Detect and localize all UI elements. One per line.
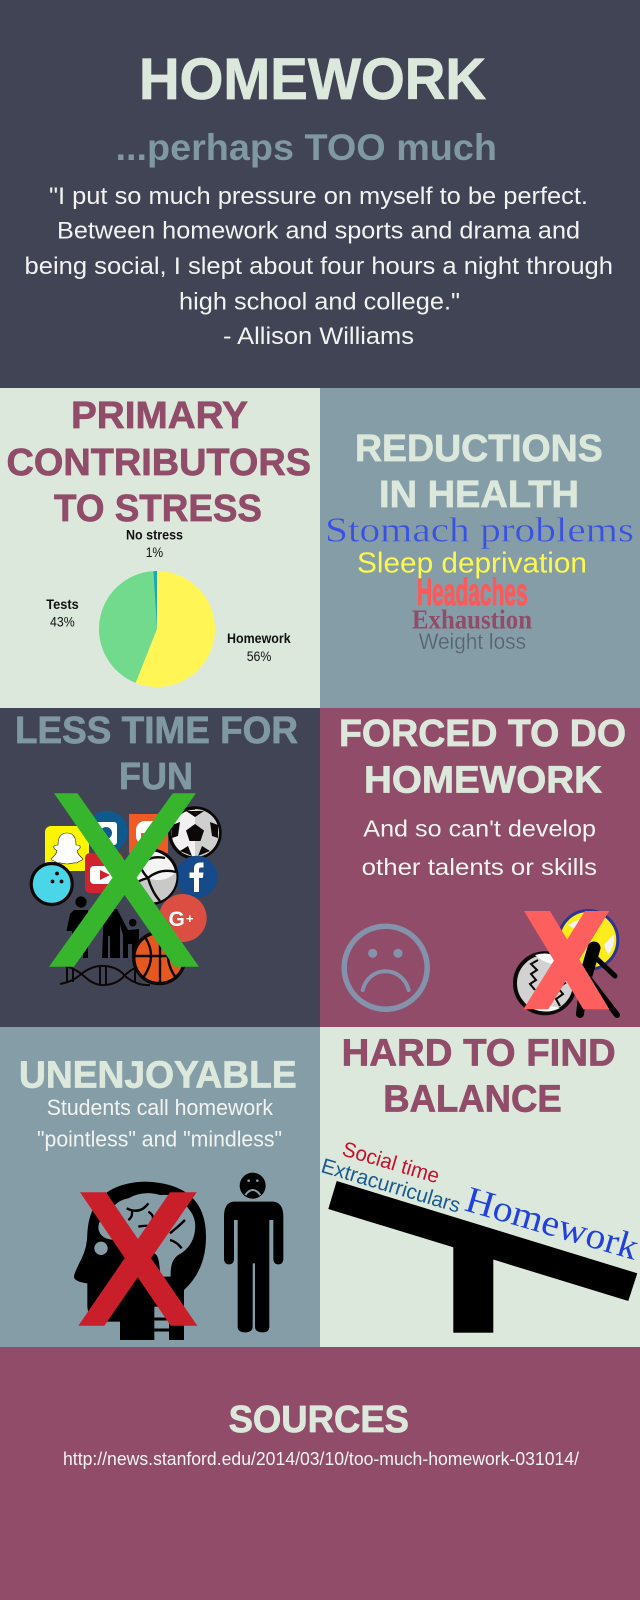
pie label: no stress: No stress [126,527,183,542]
text: cannot develop talents: other talents or skills [362,854,597,880]
word: exhaustion: Exhaustion [412,605,532,635]
word: stomach problems: Stomach problems [325,511,634,550]
icon: coral cross [523,911,609,1009]
icon: green cross [49,793,199,967]
panel: unenjoyable [0,1027,320,1347]
heading: reductions in health [355,428,603,516]
pie label: homework: 56% [247,649,271,664]
word: sleep deprivation: Sleep deprivation [357,548,587,580]
pie label: homework: Homework [227,631,291,646]
heading: hard to find balance: BALANCE [383,1079,562,1121]
icon: instagram [86,811,128,853]
pie chart [99,571,215,687]
icon: snapchat [45,826,89,871]
pie label: no stress: 1% [146,545,163,560]
heading: sources: SOURCES [229,1399,409,1441]
icon: google plus: + [186,911,194,926]
icon: basketball [134,932,185,984]
heading: less time for fun: LESS TIME FOR [15,710,298,752]
icon: running figure [580,948,617,1015]
text: cannot develop talents: And so can't develop [363,816,596,842]
heading: unenjoyable: UNENJOYABLE [19,1055,297,1097]
title: HOMEWORK [139,47,486,112]
icon: dna [60,966,150,985]
label: social time: Social time [340,1138,442,1188]
quote text [24,183,613,350]
icon: soundcloud [129,814,168,853]
pie label: no stress [126,527,183,560]
icon: red cross [78,1192,197,1326]
word: headaches: Headaches [417,572,528,614]
quote text: Between homework and sports and drama and [57,218,580,245]
icon: google plus: G [168,908,185,931]
heading: less time for fun: FUN [119,756,193,798]
icon: google plus [159,894,207,942]
panel: sources [0,1347,640,1600]
pie label: tests: Tests [46,597,79,612]
quote text: high school and college." [179,288,460,315]
icon: bowling ball [31,864,72,904]
heading: primary contributors: PRIMARY [71,395,248,437]
text: pointless and mindless: "pointless" and "mindless" [37,1127,282,1152]
text: pointless and mindless: Students call homework [47,1095,274,1120]
word: weight loss: Weight loss [419,629,526,654]
text: cannot develop talents [362,816,597,880]
source url: http://news.stanford.edu/2014/03/10/too-much-homework-031014/ [63,1449,579,1469]
text: pointless and mindless [37,1095,282,1152]
heading: forced to do homework: FORCED TO DO [339,713,626,755]
icon: facebook [176,856,218,898]
heading: hard to find balance [342,1032,616,1121]
heading: primary contributors: CONTRIBUTORS [6,442,311,484]
heading: forced to do homework: HOMEWORK [364,760,603,802]
icon: youtube [85,853,123,893]
pie label: tests: 43% [50,615,75,630]
icon: baseball [515,953,575,1013]
label: homework: Homework [461,1179,640,1269]
seesaw [328,1181,637,1333]
label: extracurriculars: Extracurriculars [319,1154,463,1218]
icon: head with brain [74,1182,206,1340]
icon: soccer ball [170,808,220,858]
icon: sad face [344,926,427,1009]
heading: less time for fun [15,710,298,798]
panel: header [0,0,640,388]
panel: primary contributors to stress [0,388,320,708]
panel: hard to find balance [319,1027,640,1347]
heading: forced to do homework [339,713,626,802]
quote text: being social, I slept about four hours a night through [24,253,613,280]
quote text: "I put so much pressure on myself to be perfect. [49,183,588,210]
heading: primary contributors [6,395,311,530]
panel: reductions in health [320,388,640,708]
pie label: tests [46,597,79,630]
icon: sad person [224,1173,283,1332]
heading: reductions in health: REDUCTIONS [355,428,603,470]
pie label: homework [227,631,291,664]
heading: hard to find balance: HARD TO FIND [342,1032,616,1074]
icon: family [66,894,139,958]
heading: reductions in health: IN HEALTH [379,474,579,516]
panel: less time for fun [0,708,320,1027]
icon: volleyball [123,850,177,904]
quote text: - Allison Williams [223,323,414,350]
heading: primary contributors: TO STRESS [54,488,262,530]
panel: forced to do homework [320,708,640,1027]
icon: volleyball [559,910,618,970]
subtitle: ...perhaps TOO much [116,127,497,168]
